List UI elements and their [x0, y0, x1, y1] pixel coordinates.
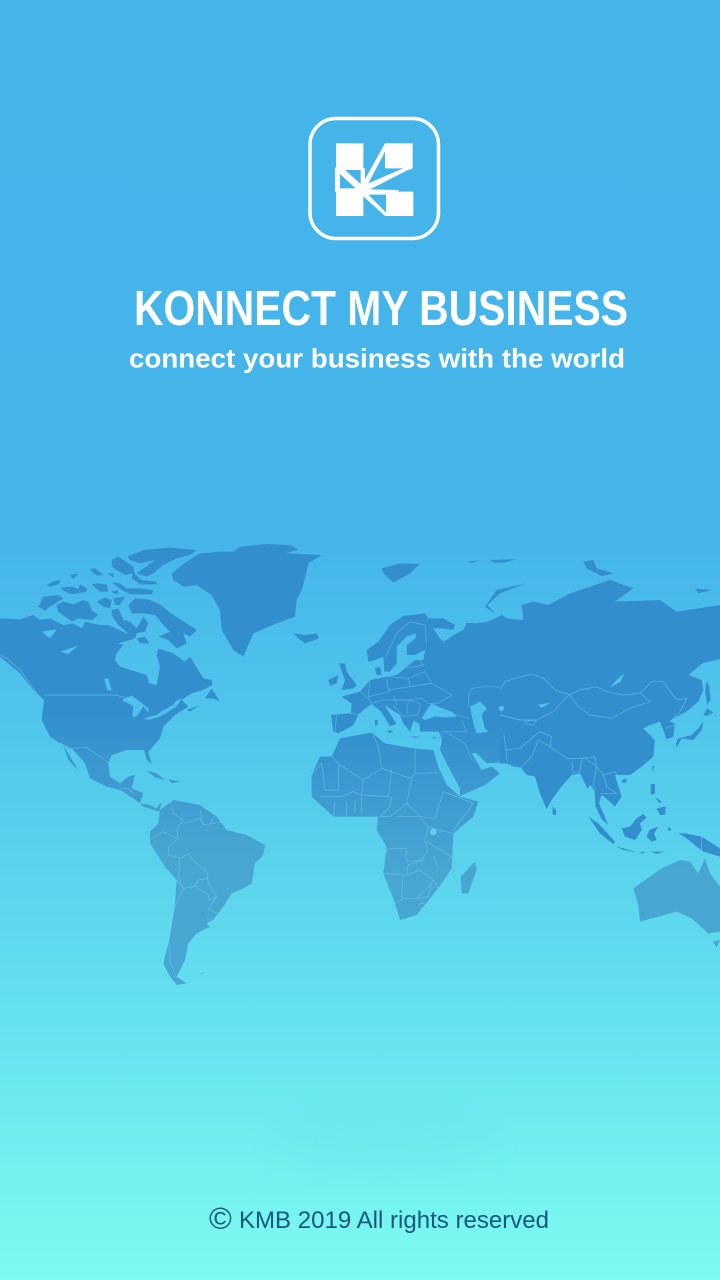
Lesser Sunda Islands [640, 852, 647, 853]
world map [0, 544, 720, 985]
Caspian Sea [470, 702, 488, 733]
Sulawesi [647, 827, 658, 842]
Mediterranean islands [375, 720, 378, 725]
Philippines [651, 784, 655, 795]
Baffin Island [128, 598, 197, 648]
faint map reflection [275, 1098, 495, 1182]
Lake Victoria [430, 829, 437, 835]
Sakhalin [705, 681, 711, 705]
Asia borders [500, 674, 702, 852]
Tasmania [713, 940, 720, 947]
logo [310, 118, 438, 238]
Asian mainland [500, 660, 707, 825]
Africa [312, 733, 478, 920]
map: Canadian Arctic [38, 548, 197, 648]
title: KONNECT MY BUSINESS [134, 282, 628, 336]
Cuba and Caribbean [147, 771, 165, 780]
logo frame [310, 118, 438, 238]
copyright text: KMB 2019 All rights reserved [239, 1207, 549, 1234]
Americas borders [0, 655, 223, 978]
Greenland [172, 544, 322, 657]
New Guinea [678, 833, 720, 857]
Svalbard [382, 563, 420, 583]
Honshu [676, 722, 703, 747]
Madagascar [461, 862, 477, 893]
map: Europe [328, 613, 515, 760]
Borneo [622, 814, 647, 840]
Aral Sea [499, 706, 504, 711]
Scandinavia [367, 613, 455, 672]
map: Americas [0, 544, 322, 985]
Black Sea [422, 703, 457, 720]
Banks Island [38, 595, 63, 611]
Great Britain [339, 663, 357, 690]
Nova Scotia [187, 705, 200, 712]
Siberian islands [583, 560, 613, 576]
Taiwan [652, 766, 654, 773]
Lake Balkhash [537, 703, 551, 708]
South America [150, 800, 265, 985]
Lake Baikal [610, 673, 624, 688]
Ireland [328, 675, 338, 686]
Denmark [375, 667, 382, 675]
Baja California [63, 745, 78, 771]
Northern islets [89, 568, 103, 576]
copyright symbol: © [209, 1201, 232, 1236]
Great Lakes [42, 629, 182, 720]
Australia [633, 858, 720, 933]
Continental Europe [331, 615, 515, 733]
Prince of Wales Island [97, 598, 112, 608]
Iceland [293, 633, 319, 643]
Victoria Island [56, 600, 98, 622]
Sumatra [588, 817, 615, 844]
logo mark [335, 143, 413, 216]
map: Russia [312, 559, 720, 947]
Europe borders [335, 622, 515, 760]
North and Central America [0, 615, 212, 812]
Ellesmere Island [127, 548, 197, 577]
Southampton Island [137, 637, 149, 643]
Boothia Peninsula [112, 608, 148, 635]
Franz Josef Land [468, 560, 480, 563]
Newfoundland [205, 688, 220, 702]
Hainan [622, 778, 627, 783]
Middle East [438, 673, 553, 796]
Axel Heiberg Island [112, 557, 135, 575]
map: Asia [499, 660, 720, 857]
Java [615, 846, 637, 852]
Sri Lanka [553, 807, 556, 815]
Novaya Zemlya [485, 583, 525, 613]
Africa borders [312, 735, 473, 908]
tagline: connect your business with the world [129, 344, 625, 374]
Moluccas [668, 827, 672, 831]
Hokkaido [703, 708, 713, 716]
